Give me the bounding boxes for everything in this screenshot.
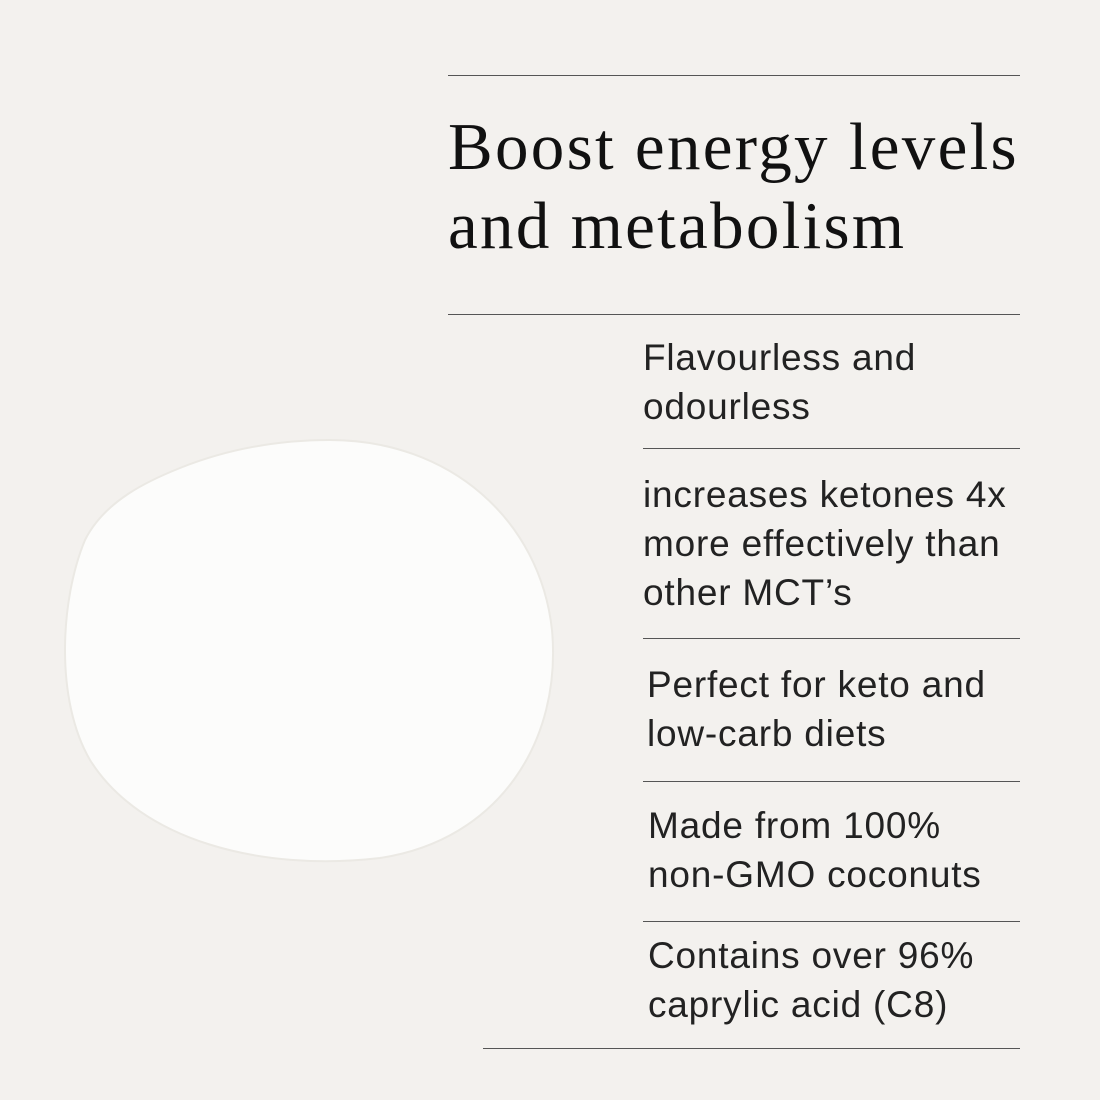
feature: caprylic acid: caprylic acid (C8) <box>648 984 948 1025</box>
feature: caprylic acid: Contains over 96% <box>648 935 974 976</box>
feature: coconuts: non-GMO coconuts <box>648 854 982 895</box>
feature: ketones: other MCT’s <box>643 572 853 613</box>
feature: keto <box>647 664 986 754</box>
feature: coconuts <box>648 805 982 895</box>
feature: flavourless: odourless <box>643 386 811 427</box>
feature: ketones: more effectively than <box>643 523 1001 564</box>
feature: keto: Perfect for keto and <box>647 664 986 705</box>
feature: keto: low-carb diets <box>647 713 886 754</box>
title <box>448 110 1019 263</box>
feature: caprylic acid <box>648 935 974 1025</box>
title: Boost energy levels <box>448 110 1019 184</box>
feature: ketones: increases ketones 4x <box>643 474 1007 515</box>
title: and metabolism <box>448 189 906 263</box>
feature: flavourless: Flavourless and <box>643 337 916 378</box>
feature: flavourless <box>643 337 916 427</box>
blob: white oil drop <box>64 439 554 862</box>
feature: coconuts: Made from 100% <box>648 805 941 846</box>
feature: ketones <box>643 474 1007 613</box>
